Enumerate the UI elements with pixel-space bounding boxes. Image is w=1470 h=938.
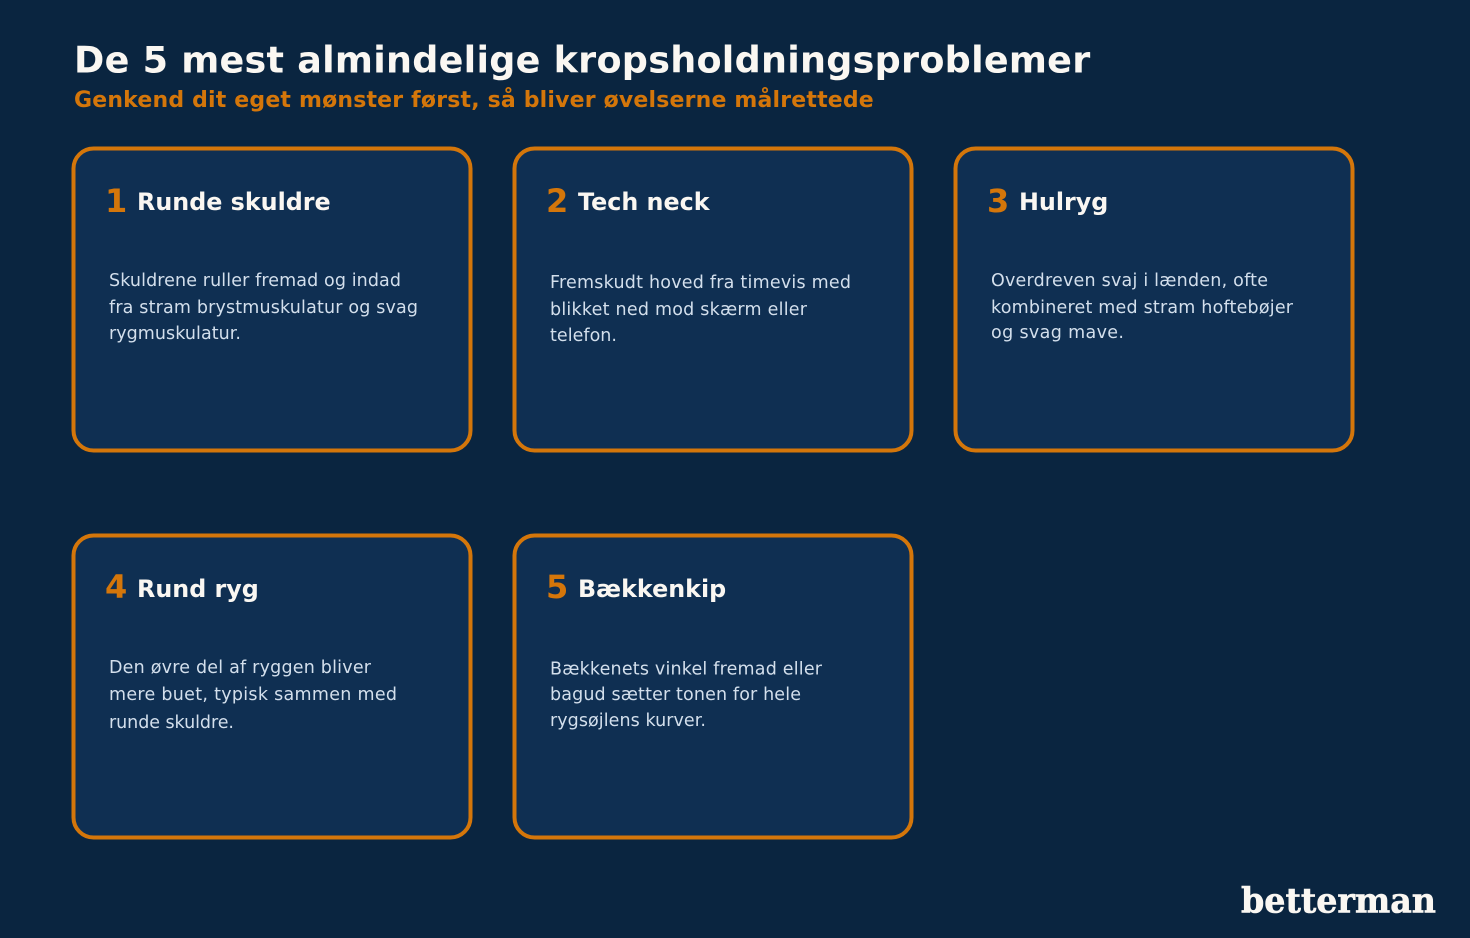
card 1 body: fra stram brystmuskulatur og svag bbox=[109, 298, 418, 318]
card 3 body: og svag mave. bbox=[991, 323, 1124, 343]
card 5 body: Bækkenets vinkel fremad eller bbox=[550, 660, 823, 680]
panel: card 3 bbox=[956, 148, 1352, 450]
card 4 body: runde skuldre. bbox=[109, 713, 234, 733]
card 2 body: telefon. bbox=[550, 326, 617, 346]
card 1 body: Skuldrene ruller fremad og indad bbox=[109, 271, 401, 291]
card 2 number: 2 bbox=[546, 182, 568, 220]
card 5 body bbox=[550, 660, 823, 731]
card 4 body: mere buet, typisk sammen med bbox=[109, 685, 397, 705]
card 4 body bbox=[109, 658, 397, 733]
card 3 number: 3 bbox=[987, 182, 1009, 220]
card 5 body: rygsøjlens kurver. bbox=[550, 711, 706, 731]
card 2 body bbox=[550, 273, 851, 346]
card 4 body: Den øvre del af ryggen bliver bbox=[109, 658, 372, 678]
panel: card 4 bbox=[74, 536, 470, 838]
card 5 number: 5 bbox=[546, 568, 568, 606]
card 1 number: 1 bbox=[105, 182, 127, 220]
card 1 body bbox=[109, 271, 418, 344]
card 3 body: Overdreven svaj i lænden, ofte bbox=[991, 271, 1268, 291]
logo: betterman: betterman bbox=[1241, 880, 1436, 922]
card 1 body: rygmuskulatur. bbox=[109, 324, 241, 344]
card 5 body: bagud sætter tonen for hele bbox=[550, 685, 801, 705]
card 3 heading: Hulryg bbox=[1019, 188, 1108, 216]
card 4 heading: Rund ryg bbox=[137, 575, 259, 603]
card 2 heading: Tech neck bbox=[578, 188, 711, 216]
panel: card 2 bbox=[514, 148, 912, 450]
card 2 body: blikket ned mod skærm eller bbox=[550, 300, 808, 320]
card 3 body bbox=[991, 271, 1294, 343]
card 2 body: Fremskudt hoved fra timevis med bbox=[550, 273, 851, 293]
card 5 heading: Bækkenkip bbox=[578, 575, 726, 603]
panel: card 1 bbox=[74, 148, 470, 450]
card 4 number: 4 bbox=[105, 568, 127, 606]
card 1 heading: Runde skuldre bbox=[137, 188, 331, 216]
subtitle: Genkend dit eget mønster først, så bliver øvelserne målrettede bbox=[74, 87, 874, 113]
panel: card 5 bbox=[514, 536, 912, 838]
card 3 body: kombineret med stram hoftebøjer bbox=[991, 298, 1294, 318]
title: De 5 mest almindelige kropsholdningsproblemer bbox=[74, 38, 1090, 82]
